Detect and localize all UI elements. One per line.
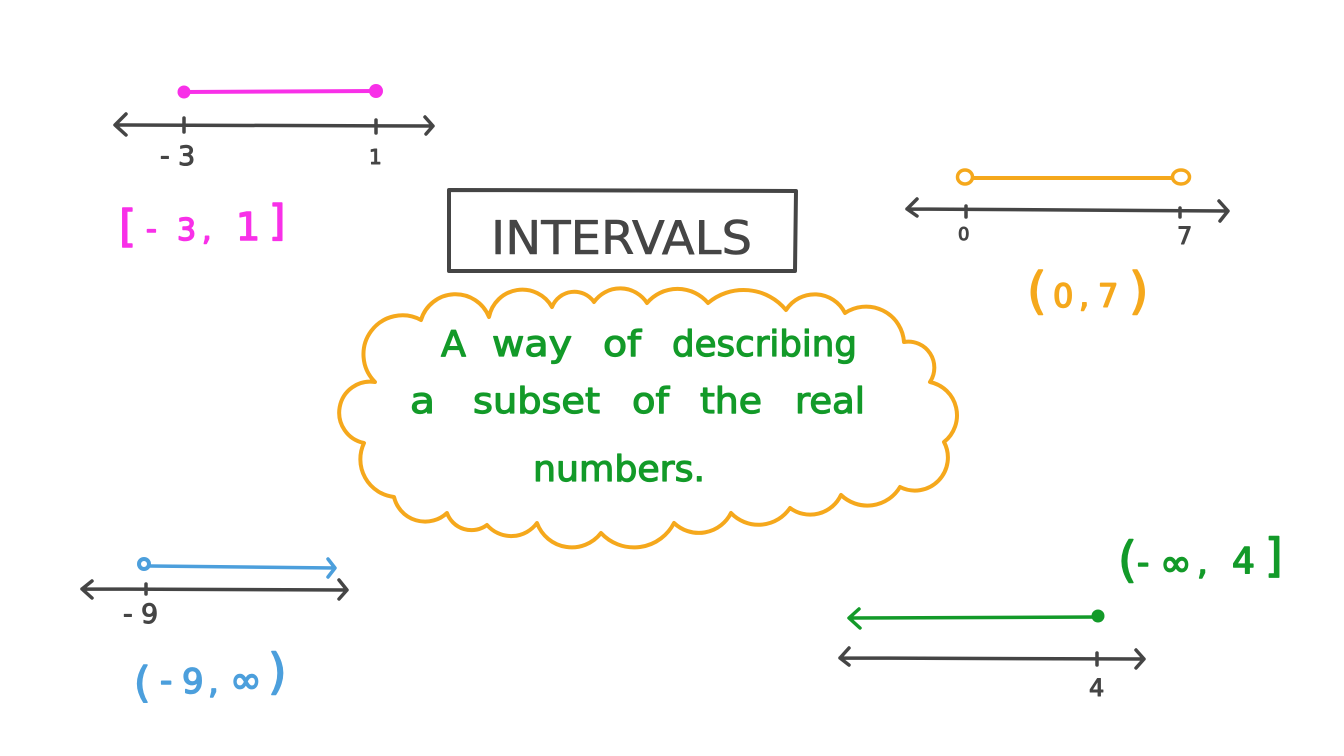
interval notation (-infinity, 4]: 4	[1232, 541, 1255, 582]
interval notation (-infinity, 4]: ]	[1265, 529, 1283, 582]
axis label 4: 4	[1089, 674, 1104, 702]
interval notation (-9, infinity): 9	[182, 662, 204, 702]
panel: interval -9 to infinity	[82, 559, 347, 707]
interval notation (0, 7): )	[1129, 262, 1149, 320]
interval notation (0, 7): 7	[1098, 277, 1118, 315]
interval notation (-infinity, 4]: (	[1118, 532, 1137, 588]
definition text: A	[441, 324, 466, 365]
definition text: a	[410, 381, 435, 422]
axis label -9: 9	[141, 599, 158, 630]
blue ray with open endpoint and arrow	[139, 559, 335, 577]
number line	[840, 648, 1144, 668]
interval notation (0, 7): (	[1027, 262, 1047, 320]
number line	[115, 114, 433, 135]
definition text: describing	[672, 324, 857, 365]
interval notation [-3, 1]: ,	[202, 213, 212, 248]
green ray with closed endpoint and arrow	[849, 609, 1104, 628]
definition text: way	[492, 324, 572, 365]
definition text: the	[700, 381, 762, 422]
interval notation (0, 7): ,	[1079, 277, 1089, 315]
interval notation [-3, 1]: -	[146, 212, 157, 247]
interval notation [-3, 1]: ]	[269, 196, 285, 245]
axis labels 0 and 7: 7	[1177, 222, 1192, 250]
axis labels 0 and 7: 0	[958, 224, 969, 245]
interval notation (-infinity, 4]: ∞	[1160, 541, 1192, 585]
definition text: numbers.	[533, 449, 705, 490]
interval notation (-9, infinity): ∞	[230, 658, 262, 702]
panel: definition cloud	[339, 288, 957, 547]
cloud outline	[339, 288, 957, 547]
panel: title box	[449, 190, 796, 271]
interval notation (-infinity, 4]: -	[1137, 543, 1149, 583]
interval notation (-infinity, 4]: ,	[1197, 543, 1208, 583]
axis label -9: -	[123, 599, 133, 630]
panel: open interval 0 to 7	[907, 170, 1228, 320]
interval notation [-3, 1]: [	[119, 201, 136, 252]
axis label -3: 3	[178, 141, 195, 172]
axis label 1: 1	[369, 145, 382, 169]
definition text	[410, 324, 865, 490]
interval notation [-3, 1]: 3	[177, 213, 196, 248]
interval notation (-9, infinity): -	[160, 661, 172, 701]
definition text: of	[603, 324, 642, 365]
definition text: real	[795, 381, 865, 422]
box outline	[449, 190, 796, 271]
title: INTERVALS	[491, 211, 752, 265]
number line	[82, 580, 347, 599]
definition text: subset	[473, 381, 600, 422]
panel: closed interval -3 to 1	[115, 84, 433, 252]
interval notation (-9, infinity): (	[134, 658, 150, 707]
interval notation [-3, 1]: 1	[236, 205, 260, 249]
interval notation (0, 7): 0	[1053, 277, 1073, 315]
definition text: of	[632, 381, 670, 422]
orange interval segment with open endpoints	[958, 170, 1190, 184]
panel: interval negative infinity to 4	[840, 529, 1283, 702]
number line	[907, 199, 1228, 221]
interval notation (-9, infinity): )	[268, 644, 287, 700]
axis label -3: -	[160, 141, 170, 172]
interval notation (-9, infinity): ,	[208, 662, 219, 702]
pink interval segment with closed endpoints	[178, 84, 383, 98]
